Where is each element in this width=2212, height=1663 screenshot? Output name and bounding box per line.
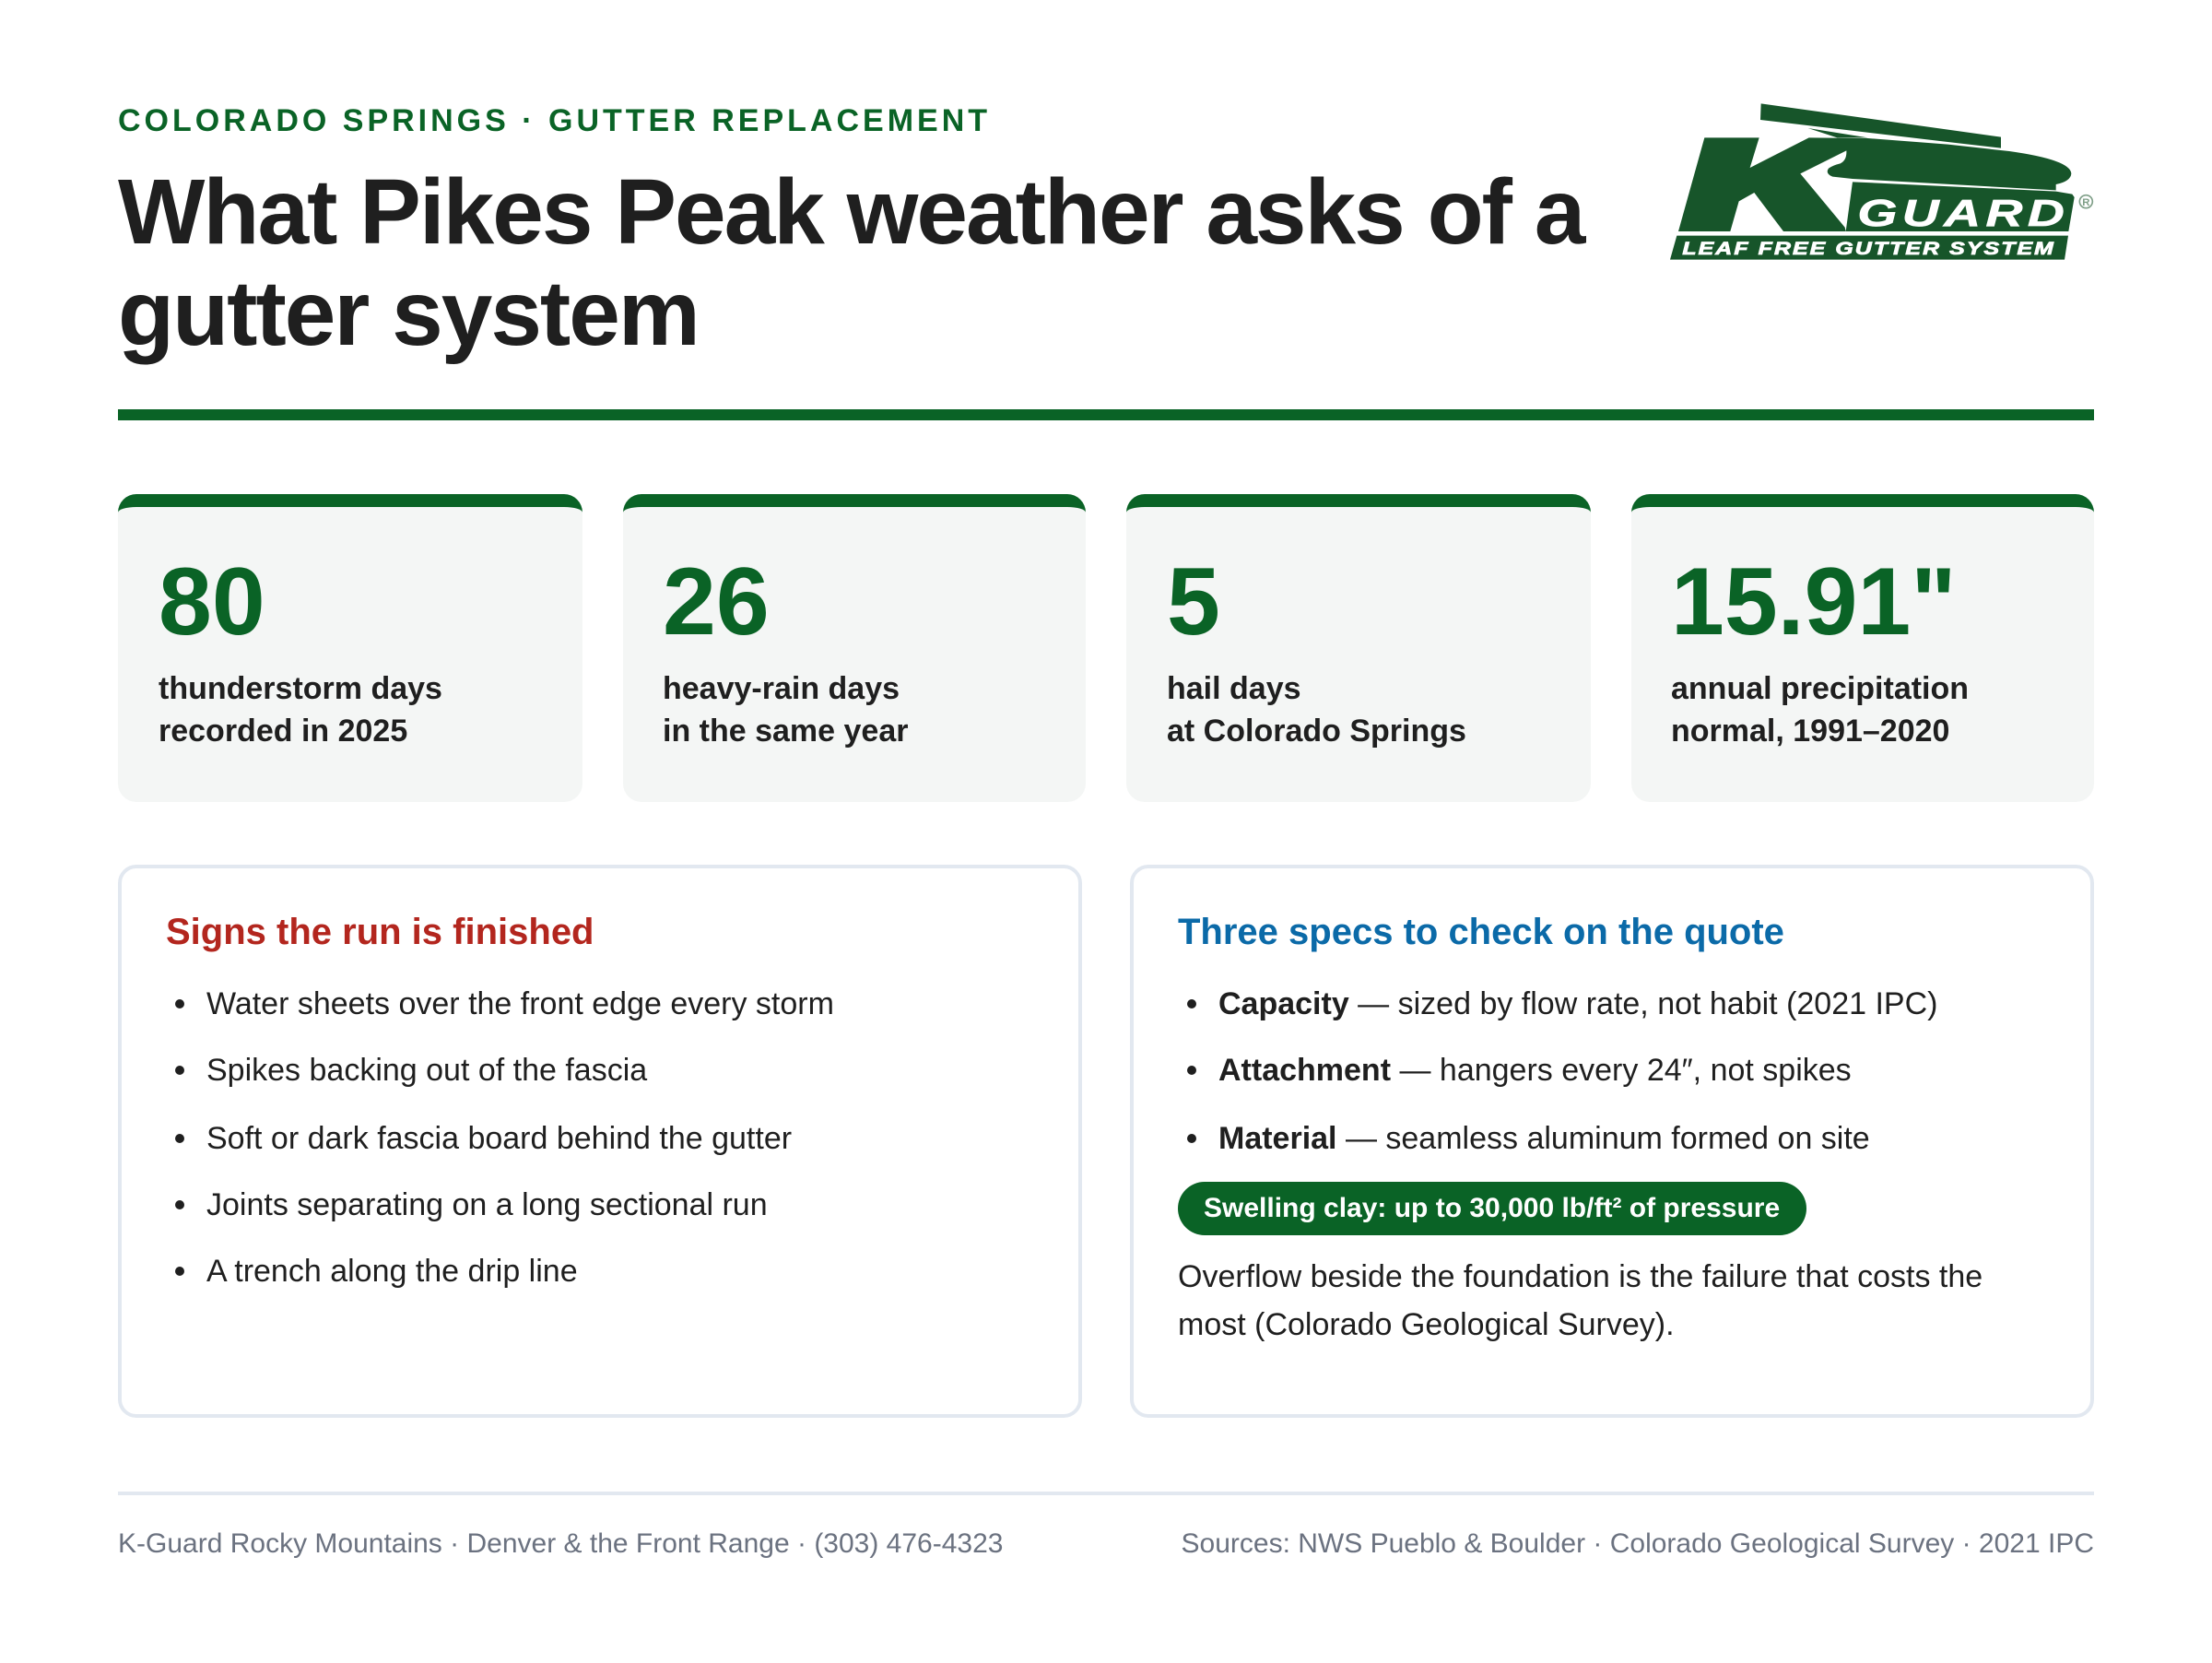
stat label: heavy-rain days	[663, 671, 900, 706]
stat label	[1671, 671, 1969, 749]
stat label	[663, 671, 908, 749]
stat label: normal, 1991–2020	[1671, 714, 1949, 749]
bullet list: Soft or dark fascia board behind the gutter	[206, 1121, 792, 1156]
stat label: recorded in 2025	[159, 714, 407, 749]
stat value: 15.91"	[1671, 548, 1957, 655]
logo: K-Guard: LEAF FREE GUTTER SYSTEM	[1682, 240, 2055, 259]
panel heading: Signs the run is finished	[166, 912, 594, 952]
panel heading: Three specs to check on the quote	[1178, 912, 1784, 952]
stat value: 26	[663, 548, 770, 655]
bullet list	[1187, 986, 1937, 1156]
callout pill: Swelling clay: up to 30,000 lb/ft² of pressure	[1204, 1193, 1780, 1223]
stat card: heavy-rain days	[623, 494, 1086, 802]
bullet list	[175, 986, 834, 1289]
stat label: hail days	[1167, 671, 1301, 706]
logo: K-Guard: R	[2082, 197, 2089, 208]
bullet list: Spikes backing out of the fascia	[206, 1053, 647, 1088]
title: What Pikes Peak weather asks of a gutter system	[118, 160, 1583, 365]
stat label	[159, 671, 442, 749]
stat label: thunderstorm days	[159, 671, 442, 706]
stat card: thunderstorm days	[118, 494, 582, 802]
logo: K-Guard: GUARD	[1857, 193, 2069, 234]
bullet list: Joints separating on a long sectional run	[206, 1187, 768, 1222]
footer left: K-Guard Rocky Mountains · Denver & the Front Range · (303) 476-4323	[118, 1528, 1003, 1559]
stat card: annual precipitation	[1631, 494, 2094, 802]
stat label: annual precipitation	[1671, 671, 1969, 706]
stat label: at Colorado Springs	[1167, 714, 1466, 749]
stat label: in the same year	[663, 714, 908, 749]
bullet list: Water sheets over the front edge every storm	[206, 986, 834, 1021]
bullet list: Capacity — sized by flow rate, not habit (2021 IPC)	[1218, 986, 1937, 1021]
stat value: 80	[159, 548, 265, 655]
callout pill	[1178, 1182, 1806, 1235]
stat label	[1167, 671, 1466, 749]
eyebrow: COLORADO SPRINGS · GUTTER REPLACEMENT	[118, 103, 991, 138]
paragraph: Overflow beside the foundation is the failure that costs the most (Colorado Geological Survey).	[1178, 1259, 1983, 1342]
bullet list: Material — seamless aluminum formed on site	[1218, 1121, 1870, 1156]
logo: K-Guard	[1670, 103, 2094, 260]
panel: three specs to check	[1130, 865, 2094, 1418]
stat value: 5	[1167, 548, 1220, 655]
panel: signs the run is finished	[118, 865, 1082, 1418]
footer right: Sources: NWS Pueblo & Boulder · Colorado Geological Survey · 2021 IPC	[1182, 1528, 2094, 1559]
stat card: hail days	[1126, 494, 1591, 802]
bullet list: A trench along the drip line	[206, 1254, 578, 1289]
bullet list: Attachment — hangers every 24″, not spikes	[1218, 1053, 1852, 1088]
